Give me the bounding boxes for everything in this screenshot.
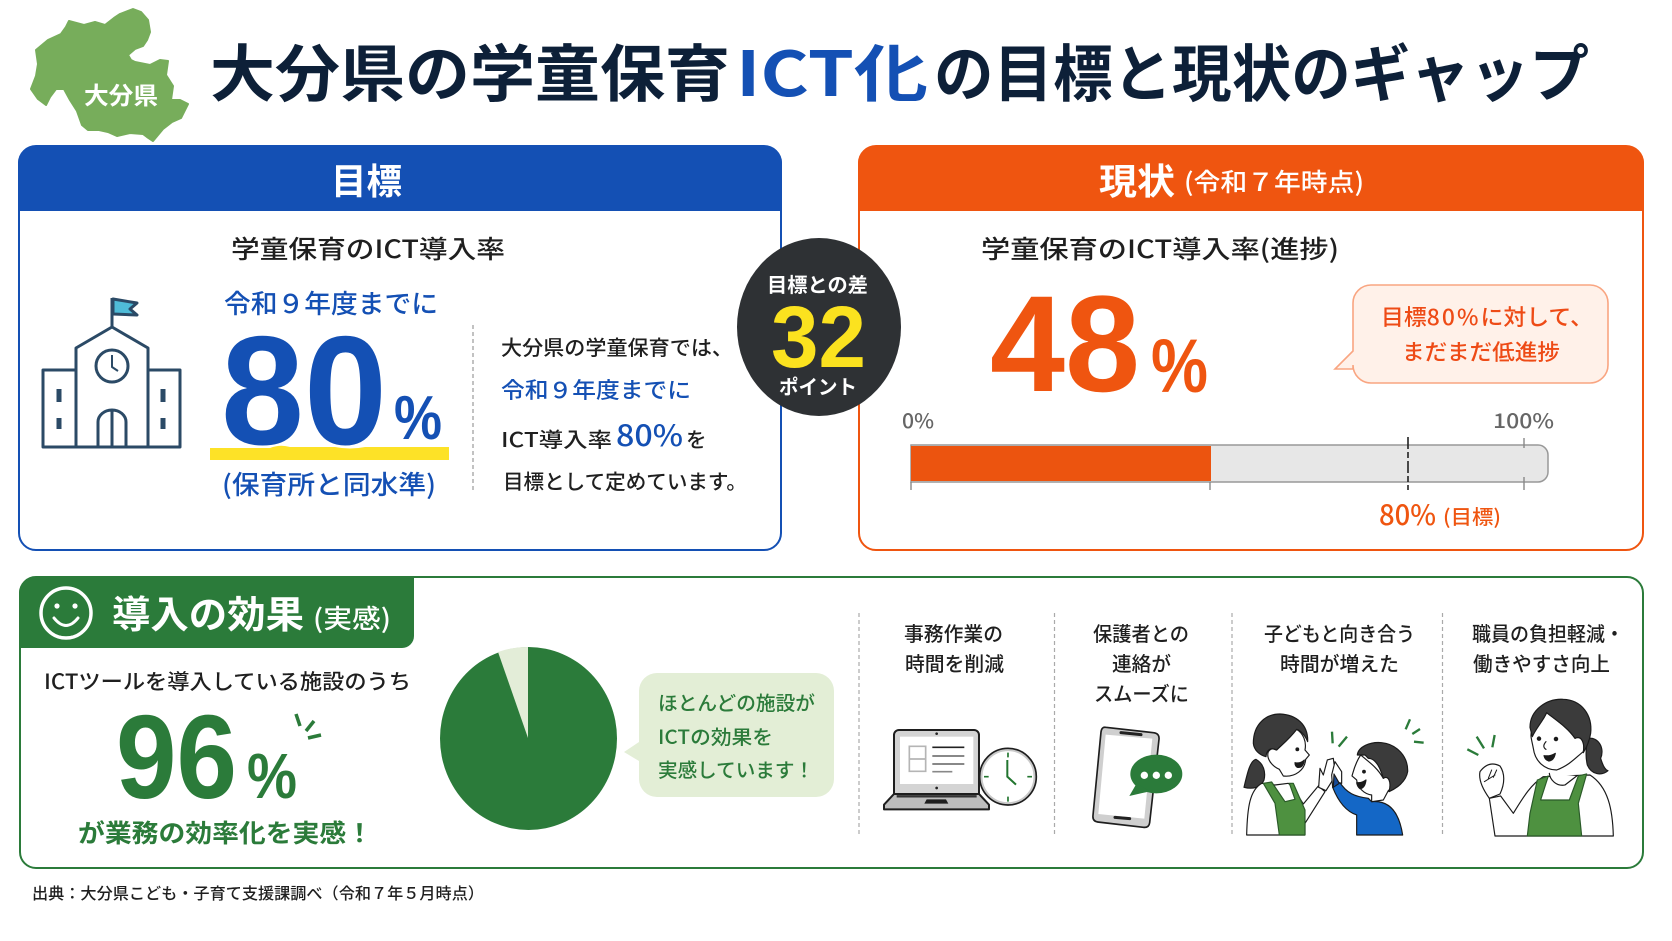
benefit: lighter staff burden: 職員の負担軽減・	[1472, 618, 1624, 647]
progress bar: 80%	[1379, 494, 1436, 534]
badge: gap 32 points: 32	[771, 289, 866, 386]
benefit: smoother parent contact: スムーズに	[1094, 678, 1189, 707]
icon: Oita prefecture map	[31, 9, 188, 141]
result text: が業務の効率化を実感！	[78, 814, 373, 850]
progress bar: (目標)	[1443, 501, 1501, 530]
callout: still low progress: まだまだ低進捗	[1402, 335, 1560, 367]
big number: 96%: 96	[116, 691, 237, 824]
big number: 48%: 48	[990, 268, 1140, 421]
benefit: more time with children	[1244, 618, 1424, 835]
big number: 48%: %	[1151, 324, 1208, 409]
callout: most facilities	[624, 673, 834, 797]
benefit: more time with children: 時間が増えた	[1280, 648, 1399, 677]
progress bar	[902, 405, 1554, 534]
benefit: smoother parent contact: 連絡が	[1112, 648, 1171, 677]
big number: 48%	[990, 268, 1208, 421]
benefit: reduce admin time: 時間を削減	[905, 648, 1004, 677]
pie chart: 96%	[440, 647, 617, 830]
icon: smartphone with chat bubble	[1093, 727, 1182, 827]
panel: effects of adoption	[19, 577, 1643, 868]
progress bar: 100%	[1493, 405, 1554, 434]
callout: most facilities: ほとんどの施設が	[658, 687, 815, 716]
panel header: target	[18, 146, 782, 211]
description text: を	[686, 423, 706, 453]
callout: most facilities: 実感しています！	[658, 754, 814, 783]
callout: still low progress: 目標80%に対して、	[1381, 300, 1593, 332]
illustration: staff with raised fist	[1467, 699, 1613, 836]
heading: current status	[1099, 153, 1364, 205]
badge: gap 32 points: 目標との差	[767, 269, 868, 298]
benefit: lighter staff burden: 働きやすさ向上	[1473, 648, 1610, 677]
panel: target	[18, 146, 782, 550]
description text: 令和９年度までに	[501, 373, 691, 405]
subheading: ICT adoption rate: 学童保育のICT導入率	[231, 230, 505, 266]
benefit: smoother parent contact	[1093, 618, 1189, 827]
note: same level as nursery: (保育所と同水準)	[222, 465, 436, 502]
progress bar: 0%	[902, 405, 934, 434]
illustration: staff and child high five	[1244, 714, 1424, 835]
icon: school	[43, 298, 180, 447]
icon: laptop and clock	[884, 730, 1036, 809]
source note: 出典：大分県こども・子育て支援課調べ（令和７年５月時点）	[32, 880, 484, 904]
title: 大分県の学童保育	[210, 24, 730, 114]
badge: gap 32 points: ポイント	[779, 371, 857, 400]
benefit: more time with children: 子どもと向き合う	[1264, 618, 1415, 647]
yellow underline	[210, 446, 449, 460]
icon: smiley	[41, 588, 91, 638]
description text: 目標として定めています。	[503, 465, 747, 495]
benefit: reduce admin time: 事務作業の	[904, 618, 1003, 647]
heading: effects	[112, 584, 391, 639]
description text: 80%	[616, 413, 683, 455]
panel header: current status	[858, 146, 1644, 211]
heading: effects: 導入の効果	[112, 584, 304, 639]
heading: target: 目標	[331, 153, 402, 205]
panel: current status	[858, 146, 1644, 550]
title: の目標と現状のギャップ	[934, 24, 1589, 114]
big number: 96%: %	[247, 740, 297, 812]
big number: 96%	[116, 691, 321, 824]
heading: current status: (令和７年時点)	[1184, 163, 1364, 199]
big number: 80%: %	[394, 384, 442, 453]
subheading: ICT adoption progress: 学童保育のICT導入率(進捗)	[981, 230, 1339, 266]
big number: 80%: 80	[221, 304, 387, 477]
deadline label: 令和９年度までに	[224, 284, 438, 321]
lead text: ICTツールを導入している施設のうち	[44, 666, 411, 696]
benefit: lighter staff burden	[1467, 618, 1624, 836]
description text: 大分県の学童保育では、	[501, 331, 733, 361]
description text	[501, 331, 747, 495]
benefit: smoother parent contact: 保護者との	[1093, 618, 1189, 647]
icon: Oita prefecture map: 大分県	[84, 76, 158, 111]
callout: still low progress	[1335, 285, 1608, 383]
title: ICT化	[736, 24, 928, 114]
heading: effects: (実感)	[313, 599, 391, 636]
title	[210, 24, 1589, 114]
benefit: reduce admin time	[884, 618, 1036, 809]
description text: ICT導入率	[501, 423, 612, 453]
heading: current status: 現状	[1099, 153, 1175, 205]
panel header: effects	[19, 577, 414, 648]
badge: gap 32 points	[737, 238, 901, 416]
callout: most facilities: ICTの効果を	[658, 721, 773, 750]
